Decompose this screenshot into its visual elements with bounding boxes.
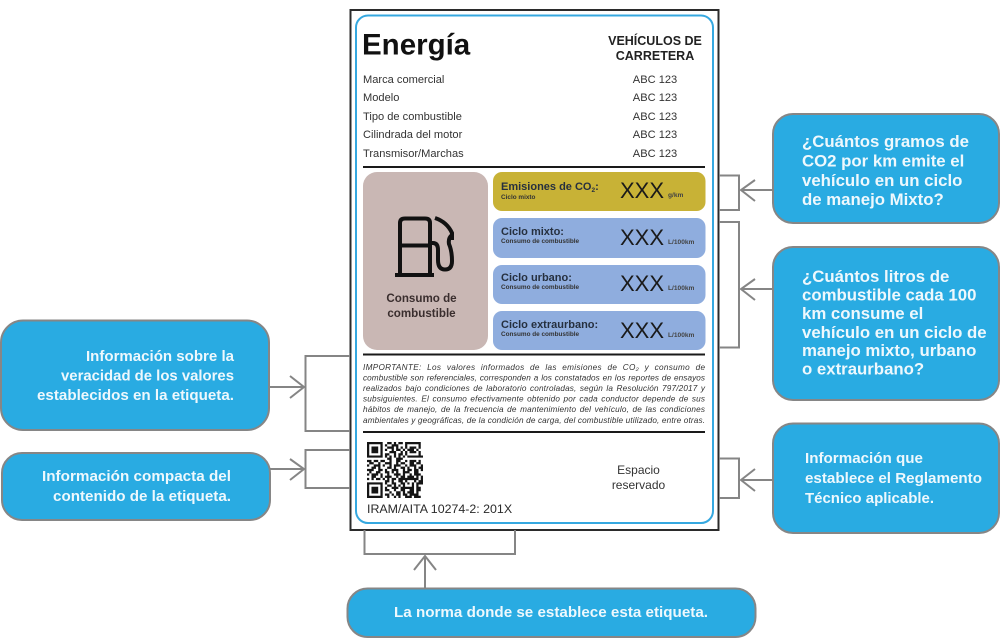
vehicle data rows: ABC 123: [633, 148, 677, 160]
standard reference text: IRAM/AITA 10274-2: 201X: [367, 502, 512, 516]
callout: standard: [348, 588, 756, 637]
panel: CO2 emissions: [493, 172, 706, 211]
panel: urban cycle: Consumo de combustible: [501, 284, 580, 291]
panel: CO2 emissions: 2: [591, 187, 595, 194]
vehicle data rows: Marca comercial: [363, 74, 444, 86]
callout: veracity information: establecidos en la etiqueta.: [37, 388, 234, 404]
callout: litres of fuel question: combustible cada 100: [802, 286, 976, 304]
panel: fuel consumption: [363, 172, 488, 350]
callout: litres of fuel question: [773, 247, 999, 400]
panel: urban cycle: L/100km: [668, 285, 695, 292]
panel: CO2 emissions: :: [595, 181, 599, 193]
disclaimer text block: hábitos de manejo, de la frecuencia de mantenimiento del vehículo, de las condiciones: [363, 405, 705, 414]
vehicle data rows: Tipo de combustible: [363, 111, 462, 123]
panel: mixed cycle: XXX: [620, 225, 664, 250]
callout: litres of fuel question: o extraurbano?: [802, 360, 924, 378]
panel: mixed cycle: Consumo de combustible: [501, 238, 580, 245]
disclaimer text block: IMPORTANTE: Los valores informados de las emisiones de CO₂ y consumo de: [363, 363, 705, 372]
QR code: [367, 443, 423, 497]
title: Energía: Energía: [362, 28, 471, 62]
callout: technical regulation: establece el Reglamento: [805, 471, 982, 487]
disclaimer text block: realizados bajo condiciones de laboratorio controladas, según la Resolución 797/2017 y: [363, 384, 706, 393]
bracket arrow: regulation: [719, 458, 773, 498]
panel: urban cycle: [493, 265, 706, 304]
callout: veracity information: [1, 320, 269, 430]
bracket arrow: standard: [364, 530, 515, 588]
disclaimer text block: [363, 363, 706, 425]
panel: CO2 emissions: g/km: [668, 192, 684, 199]
callout: compact information: Información compacta del: [42, 469, 231, 485]
callout: technical regulation: [773, 424, 999, 533]
panel: urban cycle: XXX: [620, 271, 664, 296]
vehicle data rows: [363, 74, 677, 160]
bracket arrow: CO2: [719, 176, 773, 210]
vehicle data rows: ABC 123: [633, 92, 677, 104]
disclaimer text block: subsiguientes. El consumo efectivamente obtenido por cada conductor depende de sus: [363, 394, 705, 404]
fuel consumption caption: combustible: [387, 307, 456, 320]
callout: compact information: contenido de la etiqueta.: [53, 489, 231, 505]
icon: fuel pump: [395, 218, 452, 275]
vehicle data rows: ABC 123: [633, 129, 677, 141]
callout: grams of CO2 question: [773, 114, 999, 223]
callout: litres of fuel question: manejo mixto, urbano: [802, 341, 976, 360]
vehicle data rows: Transmisor/Marchas: [363, 148, 464, 160]
panel: extra-urban cycle: Ciclo extraurbano:: [501, 319, 598, 331]
callout: litres of fuel question: vehículo en un ciclo de: [802, 323, 987, 342]
callout: litres of fuel question: ¿Cuántos litros de: [802, 267, 949, 286]
panel: mixed cycle: Ciclo mixto:: [501, 226, 564, 238]
vehicle category heading: VEHÍCULOS DE: [608, 34, 702, 48]
vehicle data rows: ABC 123: [633, 111, 677, 123]
vehicle category heading: CARRETERA: [616, 49, 694, 63]
panel: CO2 emissions: Ciclo mixto: [501, 194, 536, 201]
reserved space text: Espacio: [617, 463, 660, 477]
vehicle data rows: Cilindrada del motor: [363, 129, 463, 141]
panel: mixed cycle: [493, 218, 706, 258]
bracket arrow: veracity: [270, 356, 350, 431]
panel: extra-urban cycle: [493, 311, 706, 350]
callout: litres of fuel question: km consume el: [802, 304, 923, 323]
vehicle data rows: Modelo: [363, 92, 399, 104]
fuel consumption caption: Consumo de: [386, 292, 457, 305]
panel: extra-urban cycle: L/100km: [668, 332, 695, 339]
callout: veracity information: veracidad de los valores: [61, 368, 234, 384]
callout: compact information: [2, 453, 270, 520]
disclaimer text block: ambientales y geográficas, de la condición de carga, del combustible utilizado, entre otras.: [363, 416, 705, 425]
panel: mixed cycle: L/100km: [668, 239, 695, 246]
vehicle data rows: ABC 123: [633, 74, 677, 86]
callout: grams of CO2 question: vehículo en un ciclo: [802, 171, 962, 190]
callout: grams of CO2 question: ¿Cuántos gramos de: [802, 132, 969, 151]
callout: grams of CO2 question: de manejo Mixto?: [802, 190, 944, 209]
callout: technical regulation: Información que: [805, 451, 923, 467]
panel: extra-urban cycle: XXX: [620, 318, 664, 343]
energy label card: [350, 10, 718, 530]
panel: CO2 emissions: Emisiones de CO: [501, 181, 591, 193]
callout: veracity information: Información sobre la: [86, 349, 235, 365]
callout: grams of CO2 question: CO2 por km emite el: [802, 152, 964, 170]
callout: standard: La norma donde se establece esta etiqueta.: [394, 605, 708, 621]
disclaimer text block: combustible son referenciales, corresponden a los constatados en los reportes de ensayos: [363, 374, 705, 382]
panel: CO2 emissions: XXX: [620, 178, 664, 203]
panel: extra-urban cycle: Consumo de combustible: [501, 331, 580, 338]
bracket arrow: litres: [719, 222, 773, 348]
panel: urban cycle: Ciclo urbano:: [501, 272, 572, 284]
reserved space text: reservado: [612, 478, 666, 492]
bracket arrow: compact: [270, 450, 350, 488]
callout: technical regulation: Técnico aplicable.: [805, 491, 934, 507]
